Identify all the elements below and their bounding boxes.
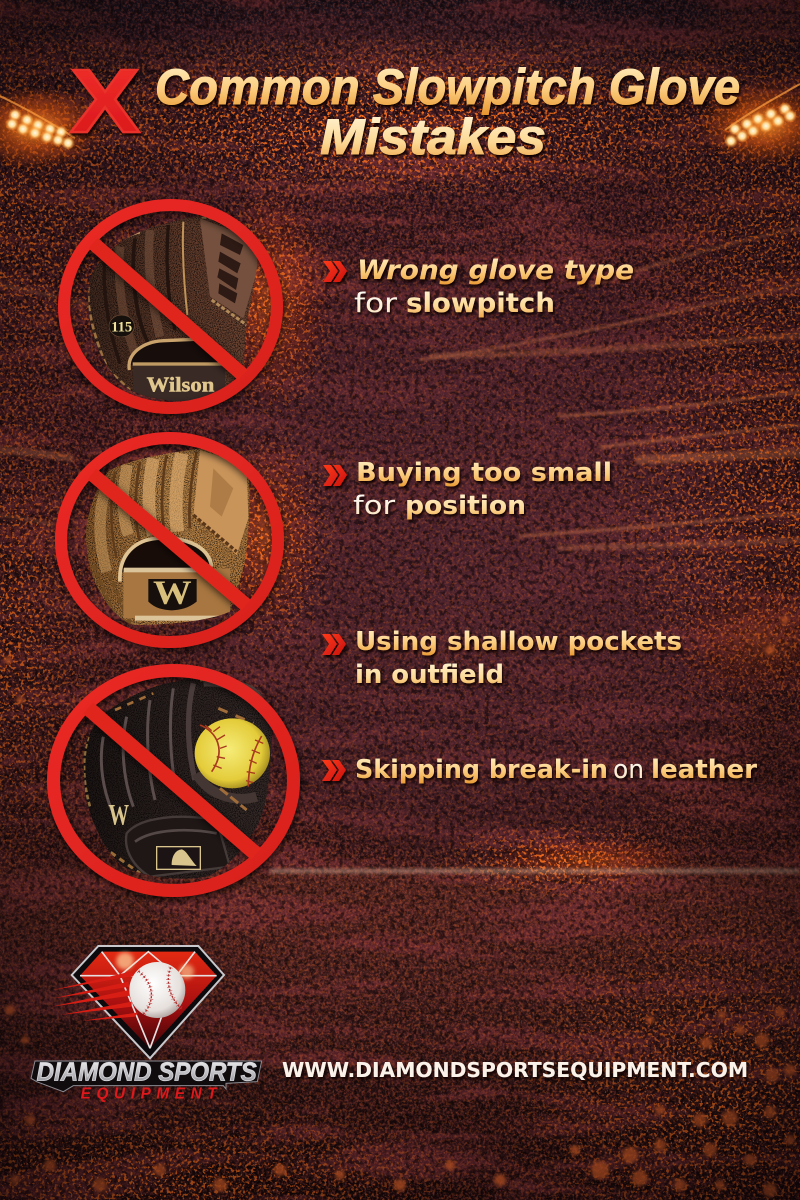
line: leather xyxy=(651,755,757,785)
panel: glove 1, brown xyxy=(64,205,277,408)
line: for xyxy=(353,491,395,521)
icon: red X: X xyxy=(70,52,140,152)
glove logo text: Wilson xyxy=(147,373,214,397)
glove logo text: W xyxy=(108,799,129,831)
title xyxy=(70,52,740,165)
line: Buying too small xyxy=(356,458,612,488)
glove size badge: 115 xyxy=(111,319,132,335)
softball xyxy=(195,718,270,788)
line: in outfield xyxy=(355,660,504,690)
icon: prohibition sign xyxy=(61,438,278,642)
icon: prohibition sign xyxy=(64,205,277,408)
title line 1: Common Slowpitch Glove xyxy=(155,59,740,115)
mistake 2 text xyxy=(323,458,612,521)
icon: prohibition sign xyxy=(54,670,294,890)
glove size badge xyxy=(109,315,134,337)
arrow bullet xyxy=(322,634,346,655)
panel: glove 3, black with softball xyxy=(54,670,294,890)
mistake 3 text xyxy=(322,627,682,690)
mistake 1 text xyxy=(323,255,634,319)
line: Wrong glove type xyxy=(357,255,634,286)
stadium light: right xyxy=(697,82,800,166)
arrow bullet xyxy=(323,261,347,282)
line: on xyxy=(613,755,644,785)
mistake 4 text xyxy=(322,755,757,785)
line: Using shallow pockets xyxy=(355,627,682,657)
brand subtitle: EQUIPMENT xyxy=(81,1085,218,1102)
line: position xyxy=(405,491,526,521)
line: slowpitch xyxy=(406,288,555,319)
arrow bullet xyxy=(322,760,346,781)
icon: diamond xyxy=(72,946,224,1058)
banner xyxy=(31,1061,262,1092)
league badge xyxy=(157,847,200,869)
icon: baseball xyxy=(129,962,185,1018)
stadium light: left xyxy=(0,86,103,170)
title line 2: Mistakes xyxy=(320,109,546,165)
brand name: DIAMOND SPORTS xyxy=(37,1057,257,1087)
website url: WWW.DIAMONDSPORTSEQUIPMENT.COM xyxy=(282,1058,748,1082)
panel: glove 2, tan xyxy=(61,438,278,642)
logo: Diamond Sports Equipment xyxy=(31,946,262,1102)
glove logo text: W xyxy=(153,575,192,612)
line: for xyxy=(354,288,398,319)
arrow bullet xyxy=(323,465,347,486)
icon: speed lines xyxy=(52,972,138,1021)
line: Skipping break-in xyxy=(355,755,608,785)
